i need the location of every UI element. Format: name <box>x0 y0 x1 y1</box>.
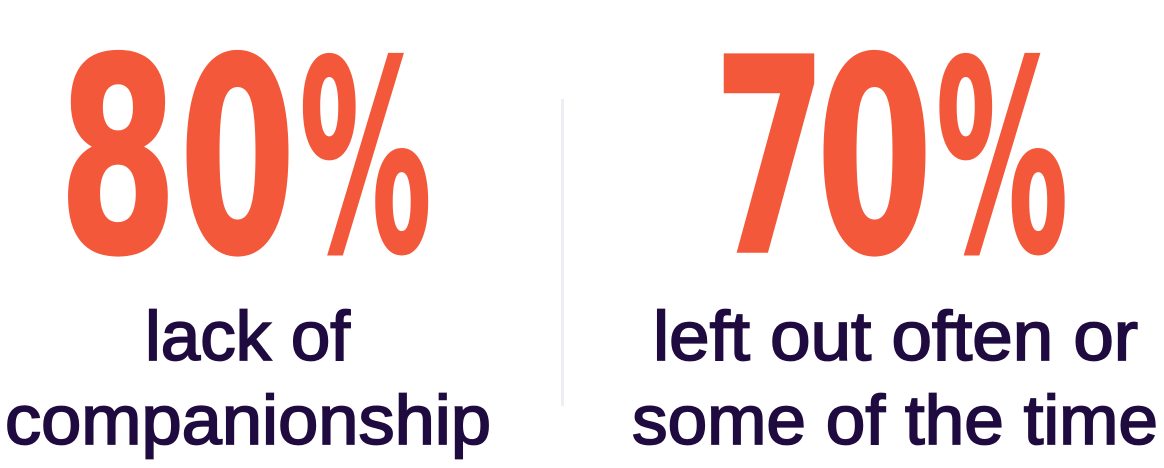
panel: right statistic <box>632 0 1158 459</box>
stat number: 80%: 0 <box>179 0 296 315</box>
stat label: left out often or some of the time: some of the time <box>632 381 1158 459</box>
stat label: left out often or some of the time <box>632 297 1158 459</box>
stat label: lack of companionship <box>5 297 491 459</box>
stat label: lack of companionship: lack of <box>145 297 351 375</box>
panel: left statistic <box>5 0 491 459</box>
stat number: 80%: % <box>299 6 432 314</box>
stat label: lack of companionship: companionship <box>5 381 491 459</box>
stat number: 70%: 0 <box>816 0 933 315</box>
stat label: left out often or some of the time: left out often or <box>653 297 1138 375</box>
stat number: 80%: 8 <box>58 2 178 316</box>
stat number: 70% <box>714 0 1068 316</box>
stat number: 80% <box>58 0 432 316</box>
stat number: 70%: 7 <box>714 0 826 316</box>
stat number: 70%: % <box>936 6 1068 314</box>
divider <box>561 99 564 406</box>
